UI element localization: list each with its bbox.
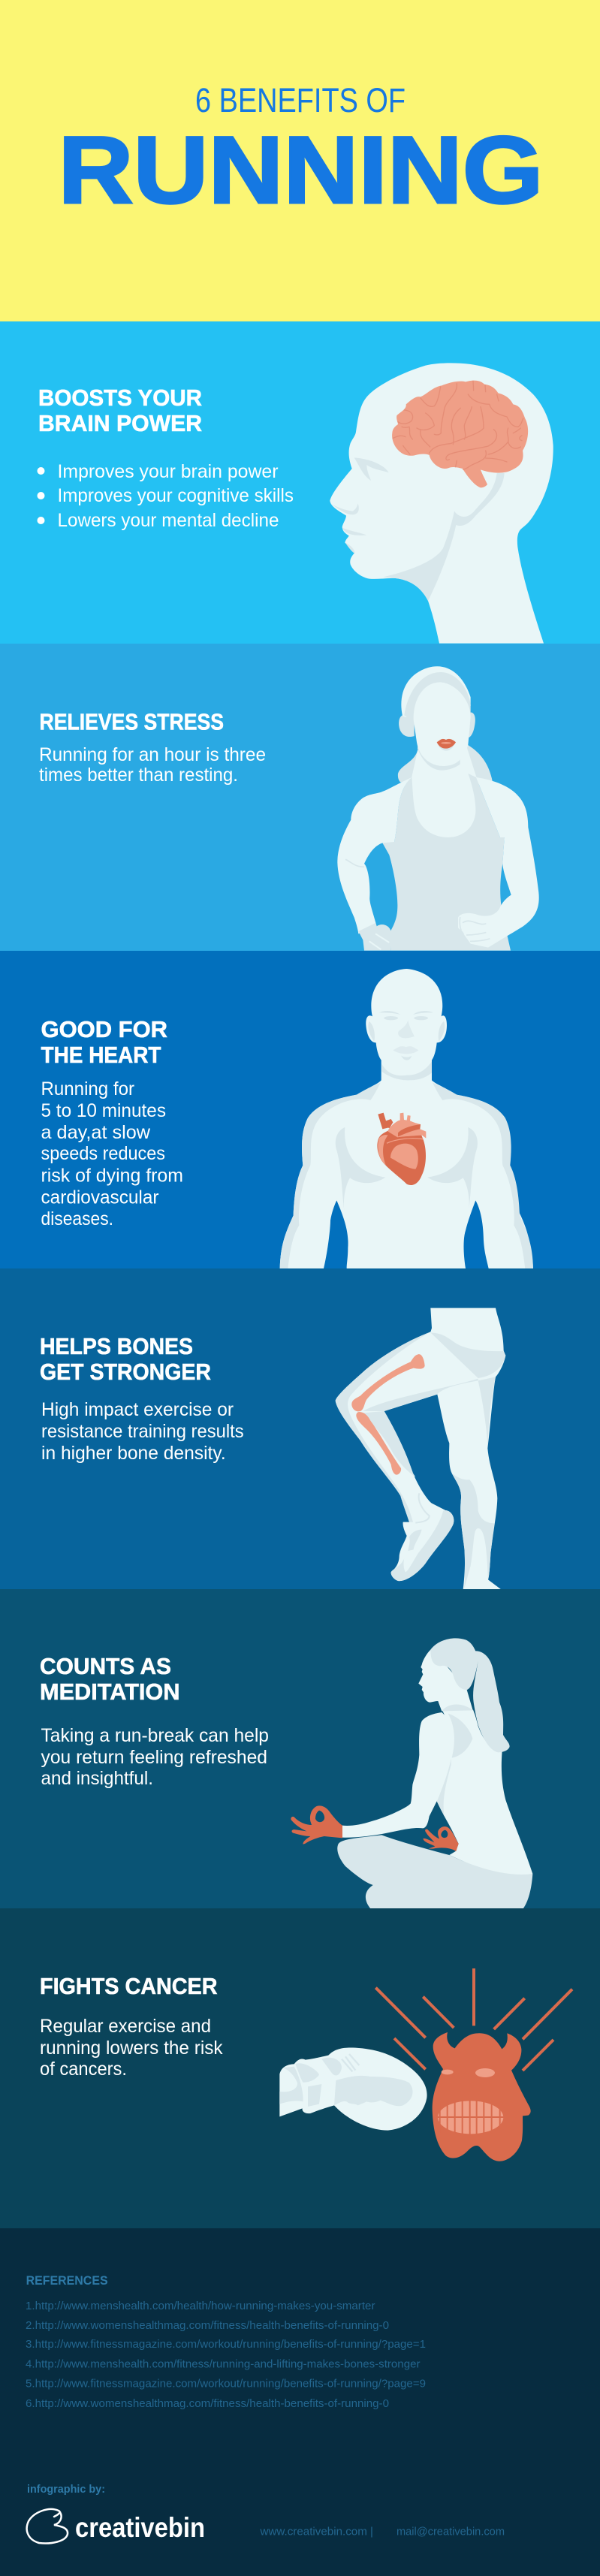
bullet list: brain benefits: Improves your cognitive skills xyxy=(57,485,294,506)
text: heart body: diseases. xyxy=(41,1208,113,1229)
logo: creativebin: creativebin xyxy=(75,2512,205,2543)
illustration: legs with bones xyxy=(336,1308,505,1589)
text: relieves stress body xyxy=(39,744,266,786)
mouth xyxy=(437,739,456,751)
title: 6 benefits of: 6 BENEFITS OF xyxy=(195,81,406,119)
heading: boosts your brain power: BRAIN POWER xyxy=(38,410,202,436)
text: reference list xyxy=(26,2300,426,2410)
illustration: seated meditating woman xyxy=(291,1638,532,1908)
text: website: www.creativebin.com | xyxy=(259,2526,373,2538)
heading: helps bones: HELPS BONES xyxy=(40,1333,193,1359)
icon: brain xyxy=(392,381,528,487)
heading: helps bones: GET STRONGER xyxy=(40,1359,211,1385)
panel: relieves stress xyxy=(0,644,600,951)
heading: boosts your brain power: BOOSTS YOUR xyxy=(38,385,202,411)
hair and ponytail xyxy=(430,1638,510,1752)
bullet list: brain benefits xyxy=(38,461,294,531)
panel: boosts your brain power xyxy=(0,321,600,644)
logo: creativebin xyxy=(27,2509,205,2543)
heading: references: REFERENCES xyxy=(26,2273,108,2288)
text: reference list: 1.http://www.menshealth.com/health/how-running-makes-you-smarter xyxy=(26,2300,375,2312)
icon: boxing glove xyxy=(279,2047,427,2131)
face xyxy=(414,682,471,766)
panel: good for the heart xyxy=(0,951,600,1268)
leg shading xyxy=(336,1332,505,1588)
text: heart body xyxy=(41,1078,183,1229)
icon: femur bone xyxy=(351,1354,425,1411)
text: relieves stress body: Running for an hour is three xyxy=(39,744,266,765)
heading: counts as meditation xyxy=(40,1653,180,1705)
illustration: male torso xyxy=(280,969,533,1268)
text: cancer body: of cancers. xyxy=(40,2059,127,2080)
text: reference list: 5.http://www.fitnessmagazine.com/workout/running/benefits-of-running/?page=9 xyxy=(26,2378,426,2390)
text: meditation body xyxy=(41,1725,269,1789)
illustration: woman runner xyxy=(337,666,539,951)
ponytail xyxy=(398,745,493,785)
bullet list: brain benefits: Improves your brain power xyxy=(57,461,278,482)
text: reference list: 3.http://www.fitnessmagazine.com/workout/running/benefits-of-running/?page=1 xyxy=(26,2339,426,2351)
icon: right hand mudra xyxy=(423,1826,459,1851)
neck and chest xyxy=(408,747,478,837)
heading: helps bones xyxy=(40,1333,211,1385)
text: bones body: in higher bone density. xyxy=(41,1443,226,1464)
text: email: mail@creativebin.com xyxy=(396,2526,505,2538)
text: heart body: speeds reduces xyxy=(41,1143,165,1164)
text: heart body: a day,at slow xyxy=(41,1122,151,1143)
ears xyxy=(399,715,415,737)
text: bones body: High impact exercise or xyxy=(41,1399,234,1420)
text: cancer body xyxy=(40,2016,223,2080)
text: heart body: 5 to 10 minutes xyxy=(41,1100,166,1121)
collar and chest shading xyxy=(437,1704,473,1816)
panel: title header xyxy=(0,0,600,321)
text: reference list: 2.http://www.womenshealthmag.com/fitness/health-benefits-of-running-0 xyxy=(26,2320,389,2332)
heading: good for the heart: THE HEART xyxy=(41,1042,161,1068)
text: relieves stress body: times better than resting. xyxy=(39,765,238,786)
neck and face xyxy=(418,1650,473,1711)
icon: impact rays xyxy=(375,1968,572,2071)
text: meditation body: Taking a run-break can help xyxy=(41,1725,269,1746)
title: running: RUNNING xyxy=(59,116,544,223)
text: bones body: resistance training results xyxy=(41,1421,244,1442)
panel: helps bones get stronger xyxy=(0,1268,600,1589)
text: heart body: Running for xyxy=(41,1078,134,1099)
body shading xyxy=(280,1021,533,1268)
illustration: glove punching cancer monster xyxy=(279,1968,572,2161)
heading: good for the heart: GOOD FOR xyxy=(41,1016,167,1042)
icon: shin bone xyxy=(356,1412,401,1475)
text: meditation body: and insightful. xyxy=(41,1768,153,1789)
text: infographic by: infographic by: xyxy=(27,2483,105,2496)
text: heart body: cardiovascular xyxy=(41,1187,159,1208)
panel: fights cancer xyxy=(0,1908,600,2228)
text: reference list: 6.http://www.womenshealthmag.com/fitness/health-benefits-of-running-0 xyxy=(26,2398,389,2410)
tank top xyxy=(382,774,511,951)
bullet list: brain benefits: Lowers your mental decline xyxy=(57,510,279,531)
torso xyxy=(437,1701,532,1883)
text: meditation body: you return feeling refreshed xyxy=(41,1747,267,1768)
text: cancer body: running lowers the risk xyxy=(40,2038,223,2059)
heading: counts as meditation: COUNTS AS xyxy=(40,1653,171,1679)
illustration: head with brain xyxy=(330,363,553,644)
face details xyxy=(379,1011,433,1060)
left hand xyxy=(358,923,391,951)
text: heart body: risk of dying from xyxy=(41,1166,183,1187)
left arm xyxy=(337,777,412,934)
hair xyxy=(401,666,471,717)
heading: counts as meditation: MEDITATION xyxy=(40,1679,180,1705)
icon: cancer monster xyxy=(433,2032,531,2161)
heading: good for the heart xyxy=(41,1016,167,1068)
text: bones body xyxy=(41,1399,244,1464)
neck shadow xyxy=(418,742,460,771)
text: reference list: 4.http://www.menshealth.com/fitness/running-and-lifting-makes-bones-stronger xyxy=(26,2358,421,2370)
right arm and fist xyxy=(458,777,539,948)
icon: left hand mudra xyxy=(291,1805,342,1845)
heading: relieves stress: RELIEVES STRESS xyxy=(39,709,224,734)
face shading xyxy=(330,457,505,601)
panel: footer xyxy=(0,2228,600,2576)
panel: counts as meditation xyxy=(0,1589,600,1908)
heading: boosts your brain power xyxy=(38,385,202,436)
icon: heart xyxy=(377,1113,426,1185)
arm xyxy=(342,1712,453,1838)
legs xyxy=(337,1835,532,1908)
heading: fights cancer: FIGHTS CANCER xyxy=(40,1973,218,1999)
text: cancer body: Regular exercise and xyxy=(40,2016,211,2037)
